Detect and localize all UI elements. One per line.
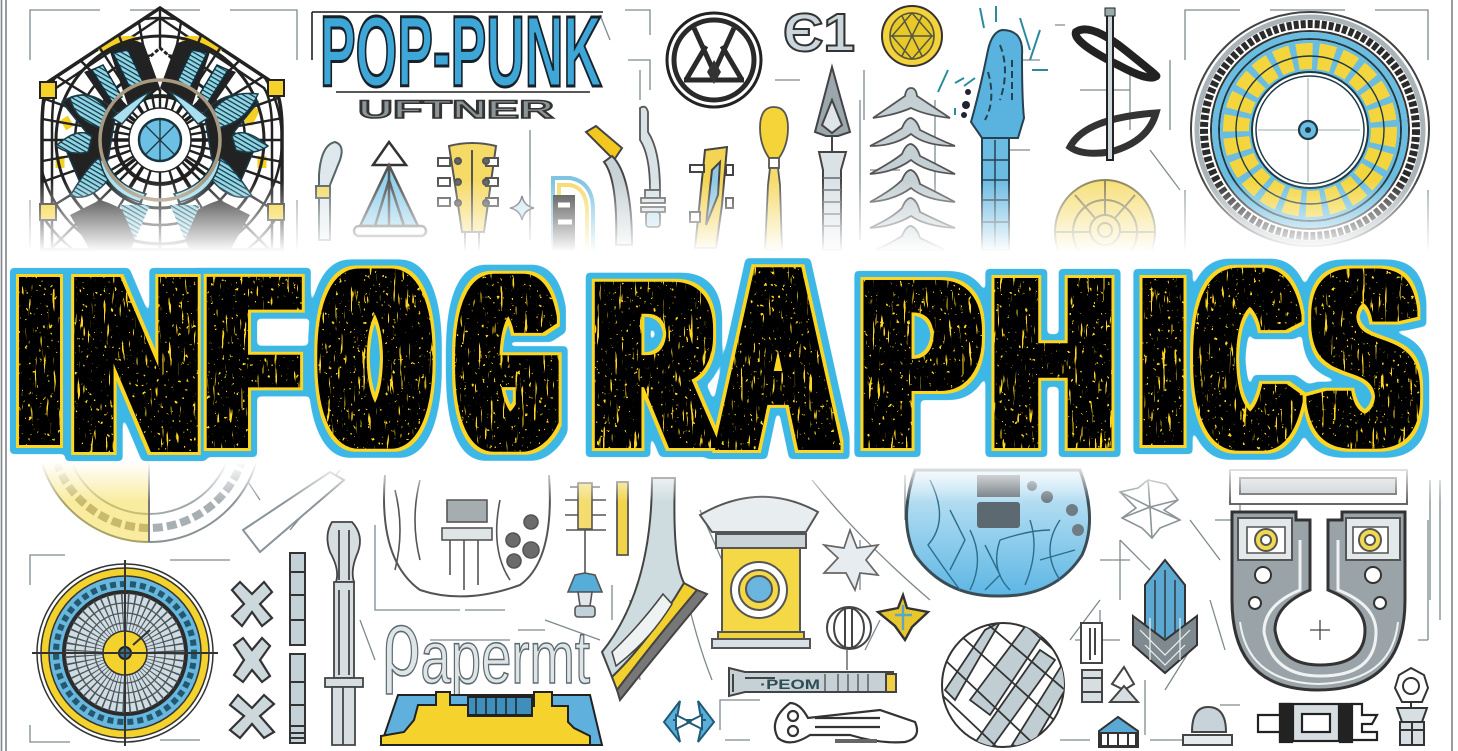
- title: INFOGRAPHICS: C: [1200, 220, 1294, 499]
- icon: yellow half dial: [42, 464, 256, 543]
- title: INFOGRAPHICS: S: [1314, 222, 1414, 496]
- icon: striped arch: [553, 178, 593, 250]
- icon: ornate shield mandala: [39, 6, 285, 250]
- icon: feather blade: [316, 142, 342, 240]
- title: INFOGRAPHICS: I: [19, 229, 60, 492]
- white title band: [9, 252, 1449, 462]
- icon: spear: [815, 67, 850, 250]
- icon: blue house: [1099, 717, 1138, 747]
- icon: yellow rod: [617, 482, 628, 555]
- icon: lattice disc: [942, 620, 1065, 750]
- icon: large yellow and blue wheel: [1191, 12, 1429, 246]
- icon: yellow bulb: [760, 107, 788, 250]
- title: INFOGRAPHICS: R: [596, 235, 710, 495]
- title: INFOGRAPHICS: F: [207, 230, 297, 497]
- icon: pale yellow dial: [1055, 180, 1155, 284]
- icon: yellow coin: [882, 6, 942, 66]
- icon: curved patterned band: [602, 478, 707, 700]
- icon: bracket clamp: [1258, 704, 1377, 742]
- icon: blue hexagon symbol: [664, 701, 714, 742]
- title: INFOGRAPHICS: H: [993, 230, 1113, 496]
- icon: yellow guitar headstock: [438, 143, 498, 250]
- icon: insulator stack with bell: [565, 483, 606, 617]
- icon: eight point star: [824, 530, 878, 590]
- icon: curved yellow neck: [586, 126, 632, 245]
- icon: ornate column: [700, 497, 818, 648]
- title: INFOGRAPHICS: I: [1143, 231, 1183, 492]
- icon: yellow building: [381, 692, 602, 745]
- shield net and yellow accents: [44, 10, 280, 248]
- icon: engraved pipe: ·PEOM: [760, 676, 820, 692]
- icon: four point star: [510, 196, 534, 220]
- icon: ring badge: [667, 13, 761, 107]
- icon: horseshoe clamp: [1232, 512, 1405, 690]
- icon: wrench tool: [775, 703, 917, 743]
- icon: crystal tower: [1133, 560, 1197, 673]
- title: INFOGRAPHICS: A: [721, 215, 835, 503]
- icon: segmented bars: [290, 553, 305, 743]
- icon: three crossed X marks: [230, 582, 274, 738]
- icon: target dial: [32, 560, 218, 746]
- icon: stacked wing tree: [870, 88, 955, 250]
- icon: triangle tower: [354, 142, 426, 236]
- title: INFOGRAPHICS: G: [464, 228, 552, 499]
- icon: small dark star: [878, 595, 928, 640]
- title: INFOGRAPHICS: N: [70, 227, 202, 501]
- fade of lower art: [9, 462, 1449, 502]
- icon: blue guitar body: [906, 470, 1090, 596]
- icon: grey guitar neck: [325, 522, 363, 745]
- icon: blue electric guitar neck: [938, 6, 1048, 250]
- badge label E1: Є1: [783, 3, 855, 63]
- icon: striped oval: [827, 607, 871, 670]
- icon: pale flower: [1120, 480, 1180, 538]
- title: POP-PUNK logo: [312, 0, 603, 108]
- subtitle: UFTNER: UFTNER: [358, 96, 554, 124]
- icon: small tower: [1081, 623, 1102, 702]
- fade of top art: [9, 180, 1449, 252]
- blue side wings: [56, 92, 268, 250]
- icon: grey guitar body: [384, 475, 550, 596]
- upper blue towers: [84, 40, 236, 112]
- center emblem: [129, 108, 191, 172]
- title: INFOGRAPHICS: O: [328, 222, 422, 497]
- icon: bent tube: [640, 107, 665, 227]
- icon: engraved pipe: [729, 668, 896, 696]
- icon: crossed propeller: [1070, 8, 1156, 160]
- rope ring: [100, 80, 220, 200]
- wordmark: papermt: apermt: [421, 616, 590, 699]
- title: INFOGRAPHICS: P: [864, 233, 976, 496]
- wordmark: papermt: ρ: [382, 593, 421, 695]
- icon: dome: [1183, 707, 1232, 745]
- icon: amp top: [1230, 470, 1407, 504]
- icon: small yellow guitar: [690, 147, 733, 248]
- yellow tabs: [40, 80, 284, 220]
- title: INFOGRAPHICS: [19, 215, 1414, 503]
- pine cone crest: [146, 48, 174, 90]
- icon: slanted blade: [243, 472, 344, 552]
- icon: double triangle: [1110, 667, 1138, 702]
- icon: gem pillar: [1395, 668, 1428, 745]
